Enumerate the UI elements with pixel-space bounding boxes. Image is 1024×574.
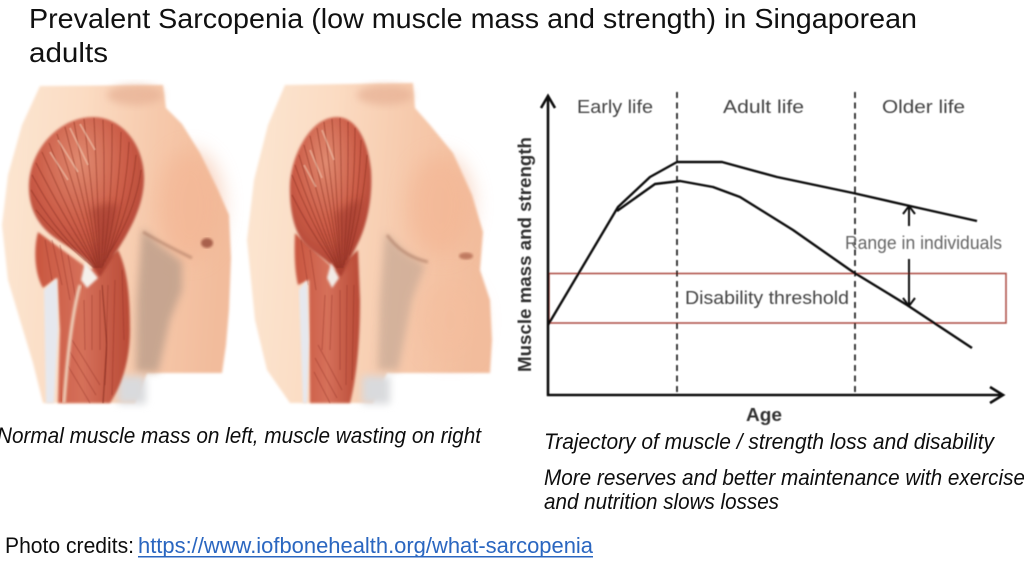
title: adults — [29, 37, 108, 68]
deltoid fibres — [292, 118, 367, 268]
deltoid highlights — [304, 130, 334, 187]
chart labels — [515, 97, 1002, 425]
chart labels: Age — [746, 405, 782, 425]
white tendons — [299, 280, 309, 403]
deltoid muscle — [29, 117, 144, 277]
axes — [541, 96, 1003, 403]
chart labels: Adult life — [723, 97, 804, 117]
lower curve — [617, 181, 972, 348]
range arrow — [903, 206, 915, 306]
armpit crease — [143, 232, 192, 258]
line chart: muscle trajectory across life — [515, 92, 1006, 425]
torso and arm skin — [247, 83, 492, 403]
chart labels: Disability threshold — [685, 288, 849, 308]
chart labels: Early life — [577, 97, 653, 117]
nipple — [201, 238, 213, 248]
belly shading — [420, 280, 480, 360]
deltoid muscle — [290, 117, 371, 277]
deltoid highlights — [50, 124, 95, 180]
neck shading — [107, 85, 163, 105]
arm muscle fibres — [301, 240, 354, 403]
caption: chart: and nutrition slows losses — [544, 489, 779, 514]
chest shading — [158, 150, 222, 260]
caption: chart: Trajectory of muscle / strength loss and disability — [544, 429, 996, 454]
side shadow — [136, 228, 182, 372]
title — [29, 3, 917, 68]
caption: arm illustrations: Normal muscle mass on left, muscle wasting on right — [0, 423, 482, 448]
deltoid fibres — [31, 118, 141, 268]
lower arm shadow — [118, 376, 146, 404]
chart labels: Muscle mass and strength — [515, 137, 535, 372]
neck shading — [357, 85, 413, 105]
photo credits: Photo credits: — [5, 533, 134, 558]
illustration: muscle wasting arm and torso — [247, 83, 492, 404]
lower arm muscles — [35, 232, 130, 403]
title: Prevalent Sarcopenia (low muscle mass and strength) in Singaporean — [29, 3, 917, 34]
muscle divide — [102, 285, 107, 403]
arm muscle fibres — [45, 240, 124, 403]
caption: chart — [544, 429, 1024, 514]
disability threshold band — [549, 274, 1006, 323]
chart labels: Older life — [882, 97, 965, 117]
life stage dividers — [677, 92, 855, 396]
chest shading — [408, 155, 472, 255]
deltoid dark core — [335, 200, 362, 270]
side shadow — [378, 232, 425, 370]
photo credits: https://www.iofbonehealth.org/what-sarcopenia — [138, 533, 594, 558]
upper curve — [548, 162, 977, 325]
deltoid dark core — [90, 203, 118, 270]
nipple — [459, 252, 473, 260]
illustration: normal muscle mass arm and torso — [2, 85, 231, 404]
white tendons — [44, 278, 58, 403]
torso and arm skin — [2, 85, 231, 403]
armpit crease — [387, 235, 428, 262]
lower arm shadow — [362, 376, 390, 404]
lower arm muscles — [295, 233, 360, 403]
chart labels: Range in individuals — [845, 233, 1002, 253]
